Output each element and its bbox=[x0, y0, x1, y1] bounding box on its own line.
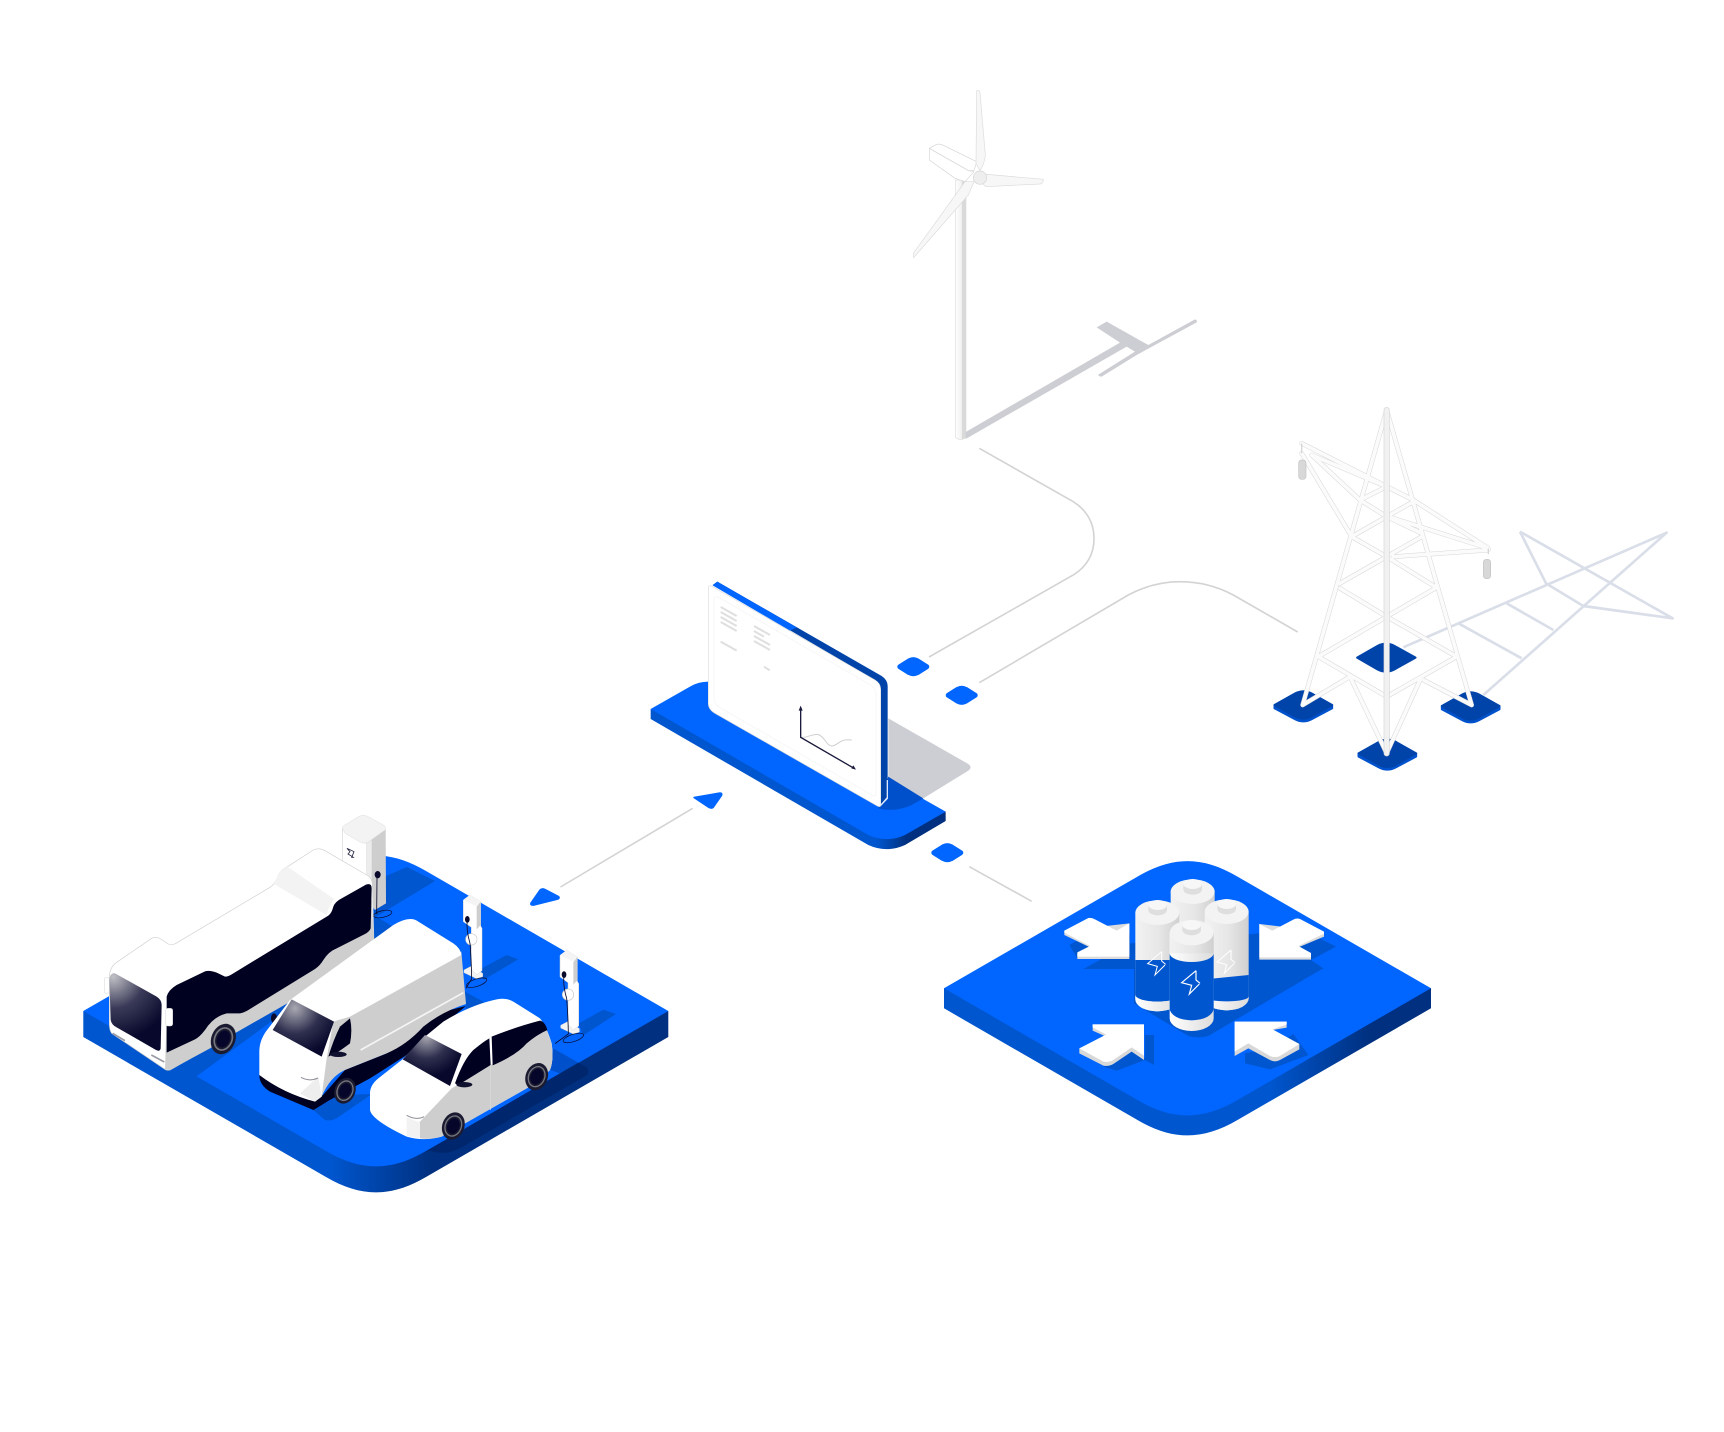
car wing mirror bbox=[456, 1082, 472, 1087]
pylon lattice bbox=[1302, 410, 1488, 753]
car front shade bbox=[407, 1117, 420, 1138]
turbine shadow bbox=[966, 319, 1197, 439]
van headlight bbox=[301, 1077, 318, 1080]
platform top bbox=[944, 861, 1431, 1115]
node diamond 3 bbox=[934, 846, 961, 860]
van side window bbox=[328, 1018, 351, 1057]
platform top bbox=[83, 856, 668, 1166]
bus mirror bbox=[104, 977, 109, 993]
bus body bbox=[109, 849, 374, 1070]
screen bevel bbox=[881, 780, 888, 806]
arrow head toward vehicles bbox=[531, 889, 559, 905]
screen chart bbox=[799, 706, 856, 770]
power pylon with shadow bbox=[1274, 410, 1673, 770]
connector line: pylon to dashboard bbox=[979, 582, 1298, 683]
pylon front foot bbox=[1358, 739, 1416, 770]
charging post B bbox=[555, 950, 585, 1045]
car front window bbox=[455, 1038, 491, 1085]
arrow top right bbox=[1259, 918, 1324, 960]
van wing mirror bbox=[330, 1052, 347, 1057]
platform: vehicle charging bbox=[83, 815, 668, 1192]
turbine mast bbox=[955, 180, 966, 439]
car shadow on platform bbox=[550, 1048, 578, 1073]
pylon back foot bbox=[1357, 644, 1415, 671]
van roof bbox=[290, 919, 461, 1022]
pylon arm end bbox=[1302, 443, 1488, 554]
van bumper bbox=[259, 1075, 325, 1110]
connector line: wind turbine to dashboard bbox=[929, 448, 1094, 657]
bus windscreen bbox=[109, 973, 162, 1051]
battery left bbox=[1135, 900, 1179, 1011]
pylon right foot bbox=[1442, 692, 1500, 722]
arrow bottom left bbox=[1079, 1024, 1144, 1066]
turbine nacelle bbox=[929, 144, 977, 182]
van lower front shade bbox=[300, 1077, 322, 1102]
platform side bbox=[651, 709, 946, 849]
van windscreen bbox=[273, 999, 334, 1057]
car side bbox=[418, 1030, 553, 1139]
platform side bbox=[944, 988, 1431, 1135]
platform top bbox=[651, 682, 946, 839]
car wheel front bbox=[438, 1109, 469, 1143]
arrow bottom right bbox=[1235, 1022, 1299, 1061]
charging post A bbox=[463, 895, 488, 989]
van rear shadow bbox=[465, 992, 487, 1017]
charger shadow bbox=[482, 955, 518, 980]
car rear window bbox=[492, 1021, 547, 1065]
node diamond 1 bbox=[900, 660, 927, 674]
car headlight bbox=[407, 1115, 424, 1118]
car door line bbox=[490, 1065, 492, 1110]
large charging station bbox=[342, 815, 392, 919]
bus side panel bbox=[165, 900, 374, 1070]
van side stripe bbox=[361, 993, 463, 1050]
car wheel rear bbox=[521, 1060, 552, 1094]
bus side windows bbox=[167, 884, 372, 1053]
bus lights bbox=[113, 1033, 164, 1062]
arrow head toward dashboard bbox=[694, 793, 722, 808]
car windscreen bbox=[403, 1035, 462, 1086]
turbine blades bbox=[913, 90, 1043, 258]
van front bbox=[259, 1000, 333, 1102]
insulator left bbox=[1299, 460, 1306, 479]
bus roof section bbox=[274, 867, 334, 915]
battery back bbox=[1171, 879, 1215, 940]
platform side bbox=[83, 1011, 668, 1192]
bus wheel bbox=[206, 1020, 240, 1058]
battery right bbox=[1205, 899, 1249, 1010]
ground shadows bbox=[167, 867, 435, 1120]
platform: battery storage bbox=[944, 861, 1431, 1135]
dashboard platform bbox=[651, 582, 970, 849]
arrow top left bbox=[1064, 918, 1129, 959]
screen shadow on platform bbox=[878, 777, 923, 810]
wind turbine with shadow bbox=[913, 90, 1197, 439]
screen face bbox=[708, 586, 881, 807]
insulator right bbox=[1483, 559, 1491, 579]
charger shadow 2 bbox=[578, 1010, 616, 1035]
screen text lines bbox=[721, 607, 770, 670]
turbine hub bbox=[973, 171, 987, 184]
car body bbox=[370, 999, 553, 1139]
bus bbox=[104, 849, 374, 1070]
node diamond 2 bbox=[948, 688, 975, 702]
van wheel bbox=[330, 1074, 360, 1107]
ground shadows bbox=[1069, 930, 1336, 1071]
screen inner frame bbox=[714, 597, 876, 796]
screen back edge bbox=[713, 582, 888, 806]
pylon shadow bbox=[1403, 532, 1673, 695]
connector line: dashboard to batteries bbox=[969, 867, 1032, 901]
van side bbox=[322, 952, 466, 1097]
van and car bbox=[259, 919, 553, 1143]
bus right mirror bbox=[166, 1008, 173, 1026]
van skirt bbox=[313, 1006, 466, 1110]
battery front bbox=[1170, 920, 1214, 1031]
connector line: dashboard to vehicles bbox=[560, 808, 693, 887]
van mirror bbox=[271, 1013, 277, 1023]
pylon left foot bbox=[1274, 691, 1332, 721]
car shadow on wall bbox=[423, 1063, 588, 1153]
screen top edge highlight bbox=[713, 582, 797, 631]
screen shadow on ground bbox=[888, 718, 970, 798]
